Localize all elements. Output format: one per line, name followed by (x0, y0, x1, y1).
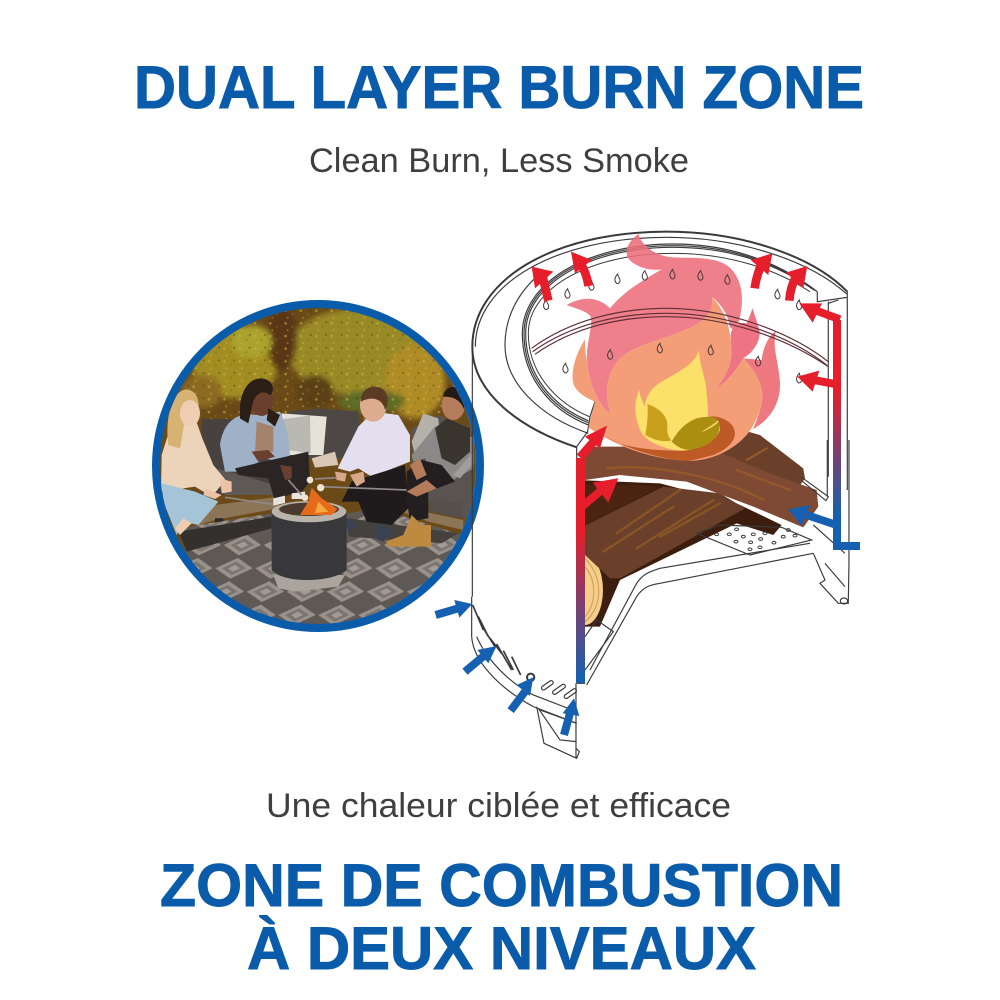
sofa (198, 408, 472, 540)
subtitle: Clean Burn, Less Smoke (309, 142, 689, 180)
fire pit cutaway diagram (436, 232, 860, 758)
woman in sweater (161, 389, 232, 535)
log shadows seen through the flame (645, 404, 671, 441)
pink flame (567, 234, 742, 414)
flame-shaped jet holes (544, 269, 802, 383)
man in vest (386, 387, 473, 547)
french title: À DEUX NIVEAUX (247, 915, 756, 982)
vent slots (473, 605, 521, 675)
man in white shirt (335, 387, 410, 542)
inner liner ring lines (532, 308, 828, 367)
left skirt (472, 597, 577, 723)
outer rim and walls (472, 232, 847, 597)
woman in denim jacket (220, 378, 310, 506)
red arrows: hot air jets (532, 252, 840, 508)
fire pit (272, 488, 347, 592)
roasting sticks (225, 478, 407, 504)
grate and legs (472, 440, 849, 758)
french title: ZONE DE COMBUSTION (160, 852, 843, 919)
french title (160, 852, 843, 982)
arrow: right flue gradient (837, 320, 860, 546)
rug (182, 511, 460, 624)
french tagline: Une chaleur ciblée et efficace (266, 787, 731, 825)
photo: friends around fire pit (145, 295, 490, 642)
photo ring (156, 304, 480, 628)
marshmallows (302, 476, 324, 501)
yellow flame (635, 349, 708, 450)
orange flame (573, 297, 762, 461)
logs (585, 432, 818, 627)
title: DUAL LAYER BURN ZONE (134, 54, 864, 121)
blue arrows: outer air intake (436, 505, 837, 735)
arrow: left flue gradient (576, 458, 585, 683)
flames (532, 234, 828, 461)
